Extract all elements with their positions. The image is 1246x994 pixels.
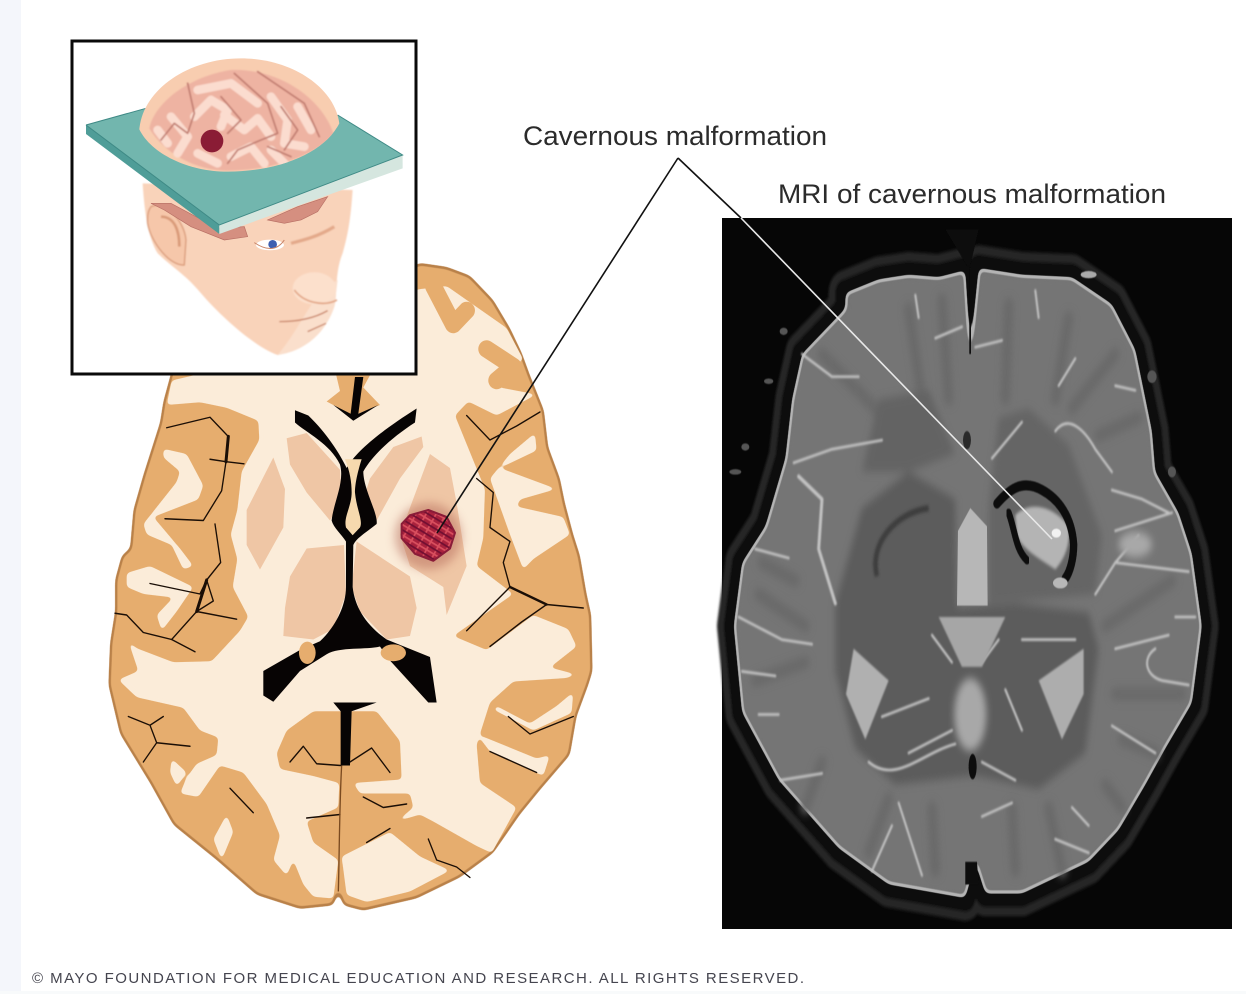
cortical sulci [739, 291, 1195, 875]
posterior midline bright area [954, 678, 986, 751]
interhemispheric fissure [338, 766, 342, 892]
brain rim [734, 268, 1202, 898]
white matter [118, 286, 577, 902]
lower brain below plate [151, 197, 328, 240]
eye [254, 240, 284, 250]
third ventricle [957, 508, 988, 606]
exposed brain [149, 70, 334, 171]
choroid plexus blobs [299, 642, 316, 664]
copyright footer: © MAYO FOUNDATION FOR MEDICAL EDUCATION AND RESEARCH. ALL RIGHTS RESERVED. [32, 970, 804, 987]
cavernous malformation lesion [402, 510, 455, 561]
illustration: axial brain section [108, 263, 593, 911]
glass plate [86, 108, 403, 225]
left basal ganglia shadow [875, 508, 929, 576]
MRI background [722, 218, 1232, 929]
ventricles [263, 377, 437, 766]
scalp ring [734, 268, 1202, 898]
lesion on MRI [997, 485, 1074, 588]
leader line: to MRI [678, 158, 1052, 539]
septum teardrop [345, 459, 362, 535]
left atrium [846, 649, 889, 739]
brain parenchyma [734, 268, 1202, 898]
cortex outline [108, 263, 593, 911]
inset: head with slice plane [72, 41, 416, 374]
leader line: to illustration [437, 158, 678, 533]
panel: MRI scan [722, 218, 1232, 929]
scalp fat specks [729, 271, 1176, 477]
label: MRI of cavernous malformation: MRI of cavernous malformation [778, 179, 1166, 209]
deep grey nuclei [247, 433, 467, 640]
face [143, 183, 353, 355]
inset lesion [201, 130, 223, 152]
white matter radiations [755, 300, 1182, 871]
lesion halo [395, 503, 462, 570]
deep white matter [835, 390, 1102, 789]
sulci [115, 412, 583, 878]
right frontal folds [433, 286, 513, 380]
right atrium [1039, 649, 1084, 739]
inset frame [72, 41, 416, 374]
midline dark structures [945, 229, 979, 884]
insular bright area [1119, 532, 1152, 557]
quadrigeminal cistern [939, 617, 1005, 667]
label: Cavernous malformation: Cavernous malformation [523, 121, 827, 151]
scalp dome [139, 58, 339, 172]
top fold [327, 363, 380, 416]
